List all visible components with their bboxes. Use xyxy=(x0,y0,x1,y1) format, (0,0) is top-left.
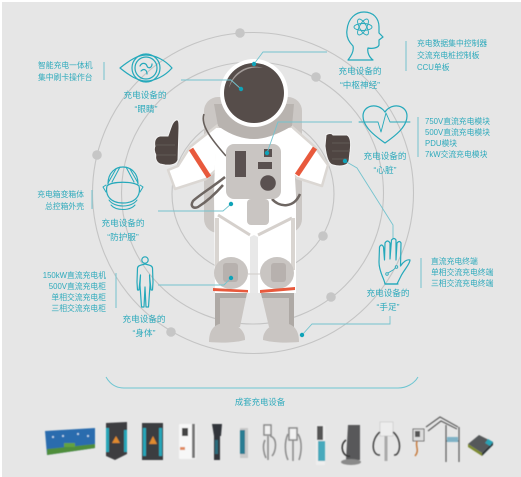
panel: hands and feet: 单相交流充电终端 xyxy=(431,267,494,277)
panel: hands and feet: 直流充电终端 xyxy=(431,256,478,266)
panel: heart: 充电设备的 xyxy=(364,150,406,161)
panel: protective suit: 总控箱外壳 xyxy=(45,201,84,211)
backpack xyxy=(204,97,302,233)
bracket xyxy=(106,377,418,388)
chest panel xyxy=(226,144,281,199)
red arm bands xyxy=(191,149,209,177)
panel: central nerves: CCU单板 xyxy=(417,62,450,72)
panel: body xyxy=(43,257,165,338)
product row xyxy=(45,417,493,465)
panel: heart: 750V直流充电模块 xyxy=(425,116,490,126)
right knee xyxy=(260,257,294,289)
panel: central nerves xyxy=(339,12,487,90)
left glove xyxy=(154,120,179,165)
icon: human figure xyxy=(137,257,153,307)
panel: eyes: “眼睛” xyxy=(135,104,158,114)
product: dual gun pile xyxy=(373,422,400,461)
right glove xyxy=(325,134,351,166)
left boot xyxy=(215,293,247,327)
panel: hands and feet: 充电设备的 xyxy=(367,287,409,298)
right arm xyxy=(288,125,328,186)
panel: body: 三相交流充电柜 xyxy=(51,303,106,313)
panel: body: “身体” xyxy=(133,327,156,338)
product: container xyxy=(45,428,95,455)
panel: heart xyxy=(359,106,490,175)
panel: protective suit: “防护服” xyxy=(107,231,139,242)
product: white pile xyxy=(179,424,196,459)
icon: eye xyxy=(120,54,172,82)
astronaut xyxy=(154,59,351,343)
panel: body: 单相交流充电柜 xyxy=(51,292,106,302)
panel: eyes xyxy=(38,54,172,114)
panel: body: 500V直流充电柜 xyxy=(49,281,106,291)
hoses xyxy=(203,114,226,156)
red leg bands xyxy=(213,288,248,292)
text: eye parts: 智能充电一体机 xyxy=(38,60,93,70)
product: pile xyxy=(285,428,301,461)
torso xyxy=(214,128,296,293)
panel: heart: 7kW交流充电模块 xyxy=(425,149,488,159)
panel: eyes: 集中刷卡操作台 xyxy=(38,72,93,82)
panel: heart: “心脏” xyxy=(374,164,397,175)
panel: central nerves: 交流充电桩控制板 xyxy=(417,50,480,60)
panel: protective suit: 充电箱变箱体 xyxy=(37,189,84,199)
panel: protective suit xyxy=(37,167,144,242)
collar xyxy=(214,104,294,139)
product: pile xyxy=(263,425,276,460)
panel: hands and feet: 三相交流充电终端 xyxy=(431,278,494,288)
panel: central nerves: 充电数据集中控制器 xyxy=(417,38,487,48)
panel: hands and feet: “手足” xyxy=(377,301,400,312)
product: slim pile xyxy=(212,424,222,460)
product: module box xyxy=(468,435,493,456)
panel: hands and feet xyxy=(367,238,494,312)
panel: heart: 500V直流充电模块 xyxy=(425,127,490,137)
product: pile with gantry xyxy=(413,417,459,462)
panel: central nerves: “中枢神经” xyxy=(340,79,380,90)
icon: heart with pulse xyxy=(359,106,410,143)
product: cabinet xyxy=(106,422,127,460)
panel: heart: PDU模块 xyxy=(425,138,457,148)
icon: hand xyxy=(379,238,410,284)
icon: head with atom xyxy=(347,12,383,60)
panel: body: 充电设备的 xyxy=(123,313,165,324)
left arm xyxy=(168,125,218,189)
heading: complete sets: 成套充电设备 xyxy=(235,397,286,407)
panel: body: 150kW直流充电机 xyxy=(43,270,106,280)
panel: central nerves: 充电设备的 xyxy=(339,65,381,76)
left knee xyxy=(214,257,248,289)
helmet xyxy=(220,59,288,127)
icon: helmet xyxy=(103,167,143,210)
product: cabinet xyxy=(142,423,163,460)
connector lines and dots xyxy=(158,52,393,337)
product: dark pile xyxy=(341,425,361,465)
product: slim tower xyxy=(316,425,325,465)
right boot xyxy=(261,293,294,327)
panel: eyes: 充电设备的 xyxy=(124,89,166,100)
product: wall pile xyxy=(240,428,248,458)
panel: protective suit: 充电设备的 xyxy=(102,217,144,228)
